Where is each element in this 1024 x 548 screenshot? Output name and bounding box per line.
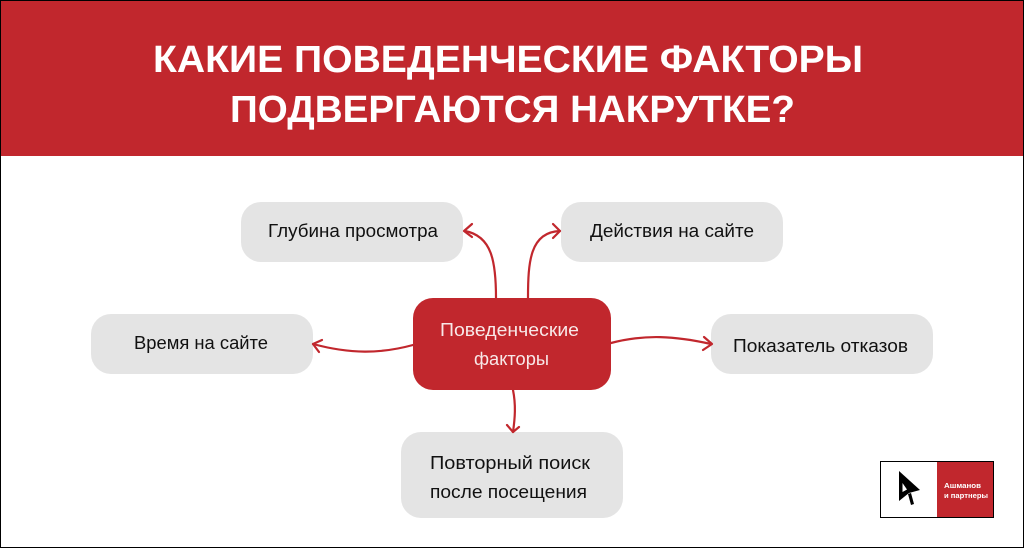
box: Время на сайте bbox=[91, 314, 313, 374]
box: Действия на сайте: Действия на сайте bbox=[590, 221, 754, 241]
logo text bbox=[944, 483, 988, 500]
logo text: и партнеры bbox=[944, 493, 988, 500]
box: Показатель отказов: Показатель отказов bbox=[733, 336, 908, 356]
box: Действия на сайте bbox=[561, 202, 783, 262]
box: Время на сайте: Время на сайте bbox=[134, 333, 268, 353]
header band bbox=[0, 0, 1024, 156]
arrow: to Показатель отказов bbox=[611, 337, 712, 350]
logo: Ашманов и партнеры bbox=[880, 462, 994, 518]
arrow: to Повторный поиск bbox=[507, 390, 519, 432]
box: Повторный поиск после посещения: после посещения bbox=[430, 482, 587, 502]
center box: Поведенческие факторы bbox=[413, 298, 611, 390]
box: Показатель отказов bbox=[711, 314, 933, 374]
box: Глубина просмотра: Глубина просмотра bbox=[268, 221, 439, 241]
icon: cursor bbox=[899, 471, 920, 505]
logo text: Ашманов bbox=[944, 483, 982, 490]
center box: Поведенческие факторы: Поведенческие bbox=[440, 320, 579, 340]
box: Повторный поиск после посещения: Повторный поиск bbox=[430, 453, 590, 473]
title: КАКИЕ ПОВЕДЕНЧЕСКИЕ ФАКТОРЫ bbox=[153, 39, 863, 81]
arrow: to Время на сайте bbox=[313, 340, 413, 352]
arrow: to Глубина просмотра bbox=[464, 224, 496, 298]
arrow: to Действия на сайте bbox=[528, 224, 560, 298]
title bbox=[153, 39, 863, 131]
title: ПОДВЕРГАЮТСЯ НАКРУТКЕ? bbox=[230, 89, 795, 131]
box: Повторный поиск после посещения bbox=[401, 432, 623, 518]
box: Глубина просмотра bbox=[241, 202, 463, 262]
center box: Поведенческие факторы: факторы bbox=[474, 349, 549, 369]
